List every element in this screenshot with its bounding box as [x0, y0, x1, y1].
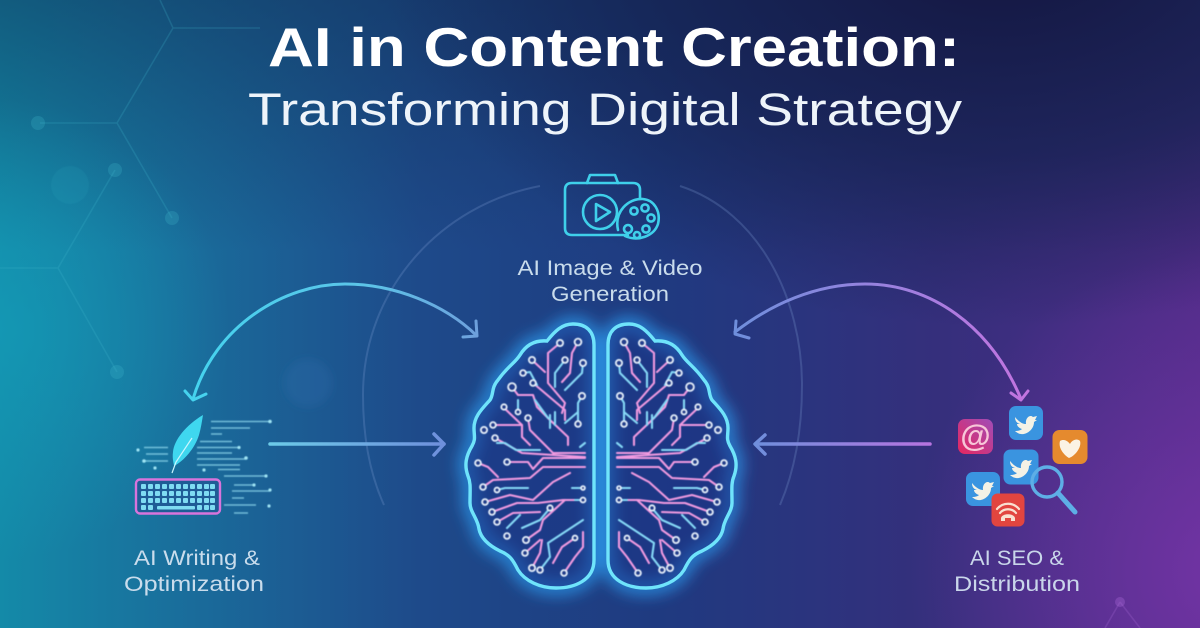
tile: phone signal [992, 494, 1024, 526]
brain left outline [466, 324, 594, 588]
decorative hexagon, lower centre left [284, 359, 332, 407]
title line 1: AI in Content Creation: [268, 16, 960, 78]
arrow: writing to brain arc [185, 284, 477, 400]
circuit traces left [475, 338, 586, 576]
icon: social media tiles and magnifier [958, 406, 1088, 526]
title [248, 16, 963, 135]
background orbit circle [363, 186, 802, 505]
arrow: SEO to brain [755, 435, 930, 454]
label: AI Writing and Optimization: Optimization [124, 573, 264, 596]
label: AI Image and Video Generation: AI Image & Video [518, 257, 702, 280]
tile: bird 2 [1004, 450, 1038, 484]
brain right outline [608, 324, 736, 588]
tile: heart bird orange [1052, 430, 1088, 464]
camera body [565, 183, 640, 235]
label: AI Writing and Optimization: AI Writing & [134, 547, 260, 570]
decorative nodes, bottom right [1105, 597, 1140, 628]
text lines [136, 420, 272, 513]
brain glow [466, 324, 736, 588]
tile: bird 3 [966, 472, 1000, 506]
icon: quill, keyboard and text lines [136, 415, 272, 514]
arrow: brain to SEO arc [735, 284, 1028, 400]
quill [172, 415, 203, 473]
camera top [587, 175, 618, 183]
title line 2: Transforming Digital Strategy [248, 84, 963, 135]
label: AI SEO and Distribution [954, 547, 1080, 596]
palette [617, 199, 659, 238]
decorative hexagon network, top left [0, 0, 260, 379]
arrow: writing to brain [270, 434, 444, 455]
play button [583, 195, 617, 229]
circuit traces right [616, 338, 727, 576]
keyboard [136, 480, 220, 514]
tile: bird 1 [1009, 406, 1043, 440]
brain [466, 324, 736, 588]
magnifier [1032, 467, 1075, 512]
tile: at sign: @ [960, 418, 991, 453]
label: AI Image and Video Generation [518, 257, 702, 306]
label: AI Image and Video Generation: Generation [551, 283, 669, 306]
label: AI SEO and Distribution: Distribution [954, 573, 1080, 596]
label: AI SEO and Distribution: AI SEO & [970, 547, 1064, 570]
label: AI Writing and Optimization [124, 547, 264, 596]
icon: camera and palette [565, 175, 659, 238]
